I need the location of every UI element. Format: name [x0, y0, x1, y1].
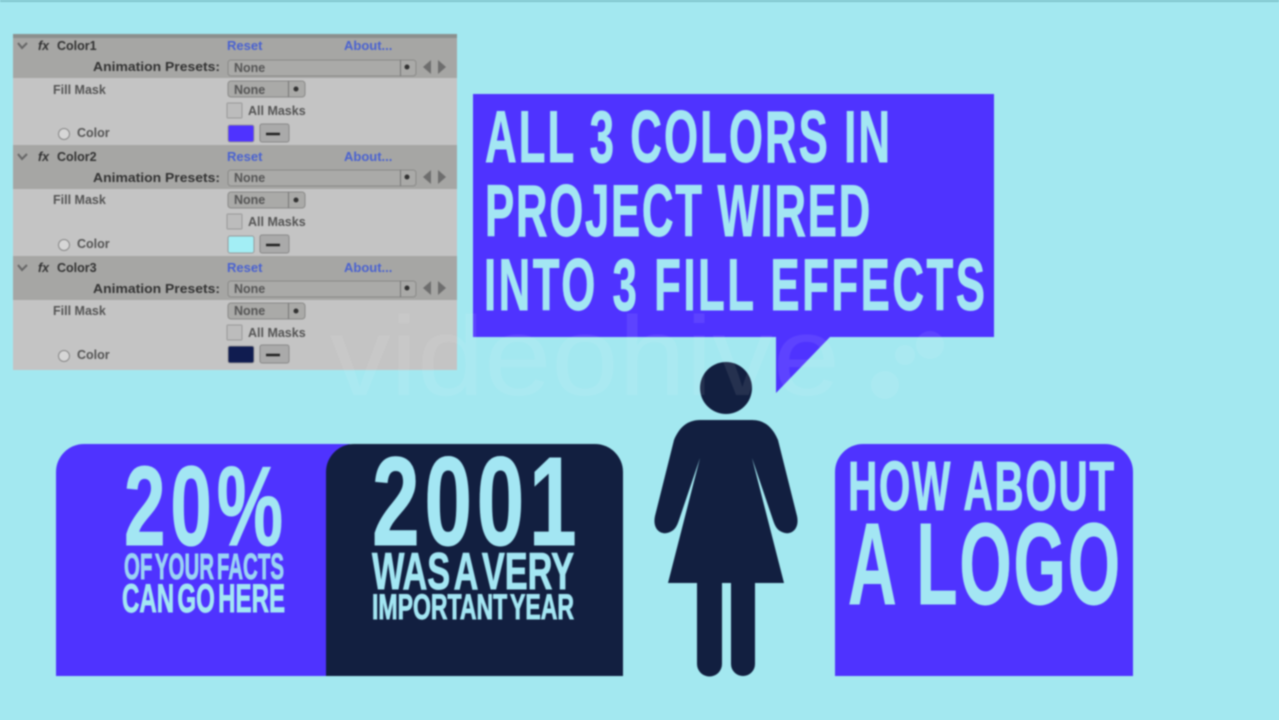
effect group: Color1: Fill Mask: [53, 83, 106, 97]
effect group: Color3: About...: [344, 260, 392, 275]
watermark: videohive: [330, 294, 840, 419]
caption: line 1: OF YOUR FACTS: [124, 546, 284, 587]
stat: 20%: 20%: [124, 443, 283, 570]
stat: 2001: 2001: [372, 430, 577, 572]
panel: 2001 fact: [326, 430, 623, 676]
heading: line 3: INTO 3 FILL EFFECTS: [484, 245, 985, 326]
effect group: Color1: About...: [344, 38, 392, 53]
effect group: Color2: All Masks: [248, 215, 306, 229]
effect group: Color3: All Masks: [248, 326, 306, 340]
caption: line 2: CAN GO HERE: [122, 577, 285, 621]
effect group: Color1: fx: [38, 39, 50, 53]
effect group: Color1: Animation Presets:: [93, 60, 220, 74]
effect group: Color3: Fill Mask: [53, 304, 106, 318]
effect group: Color2: Color2: [57, 150, 97, 164]
panel: 20% fact: [56, 443, 350, 676]
panel: logo placeholder: [835, 444, 1133, 676]
effect group: Color3: Animation Presets:: [93, 282, 220, 296]
effect group: Color2: Color: [77, 237, 110, 251]
effect group: Color2: Reset: [227, 149, 263, 164]
effect group: Color1: None: [234, 83, 265, 97]
effect group: Color2: None: [234, 193, 265, 207]
effect group: Color1: Color1: [57, 39, 97, 53]
effect group: Color1: Reset: [227, 38, 263, 53]
text: a logo: A LOGO: [848, 500, 1120, 630]
text: how about: HOW ABOUT: [848, 448, 1114, 526]
effect group: Color3: Color: [77, 348, 110, 362]
caption: line 1: WAS A VERY: [372, 543, 574, 601]
effect group: Color1: [13, 34, 457, 145]
panel: effect controls: [13, 34, 457, 370]
heading: line 1: ALL 3 COLORS IN: [485, 97, 890, 178]
effect group: Color3: None: [234, 282, 265, 296]
effect group: Color3: Reset: [227, 260, 263, 275]
effect group: Color1: Color: [77, 126, 110, 140]
effect group: Color1: All Masks: [248, 104, 306, 118]
effect group: Color3: Color3: [57, 261, 97, 275]
effect group: Color2: About...: [344, 149, 392, 164]
heading: line 2: PROJECT WIRED: [485, 171, 870, 252]
effect group: Color2: Fill Mask: [53, 193, 106, 207]
effect group: Color2: fx: [38, 150, 50, 164]
effect group: Color2: Animation Presets:: [93, 171, 220, 185]
effect group: Color1: None: [234, 61, 265, 75]
effect group: Color2: [13, 145, 457, 256]
effect group: Color3: [13, 256, 457, 370]
icon: woman figure: [654, 362, 798, 676]
speech bubble with heading: [473, 94, 994, 393]
effect group: Color2: None: [234, 171, 265, 185]
effect group: Color3: fx: [38, 261, 50, 275]
caption: line 2: IMPORTANT YEAR: [372, 588, 574, 627]
effect group: Color3: None: [234, 304, 265, 318]
